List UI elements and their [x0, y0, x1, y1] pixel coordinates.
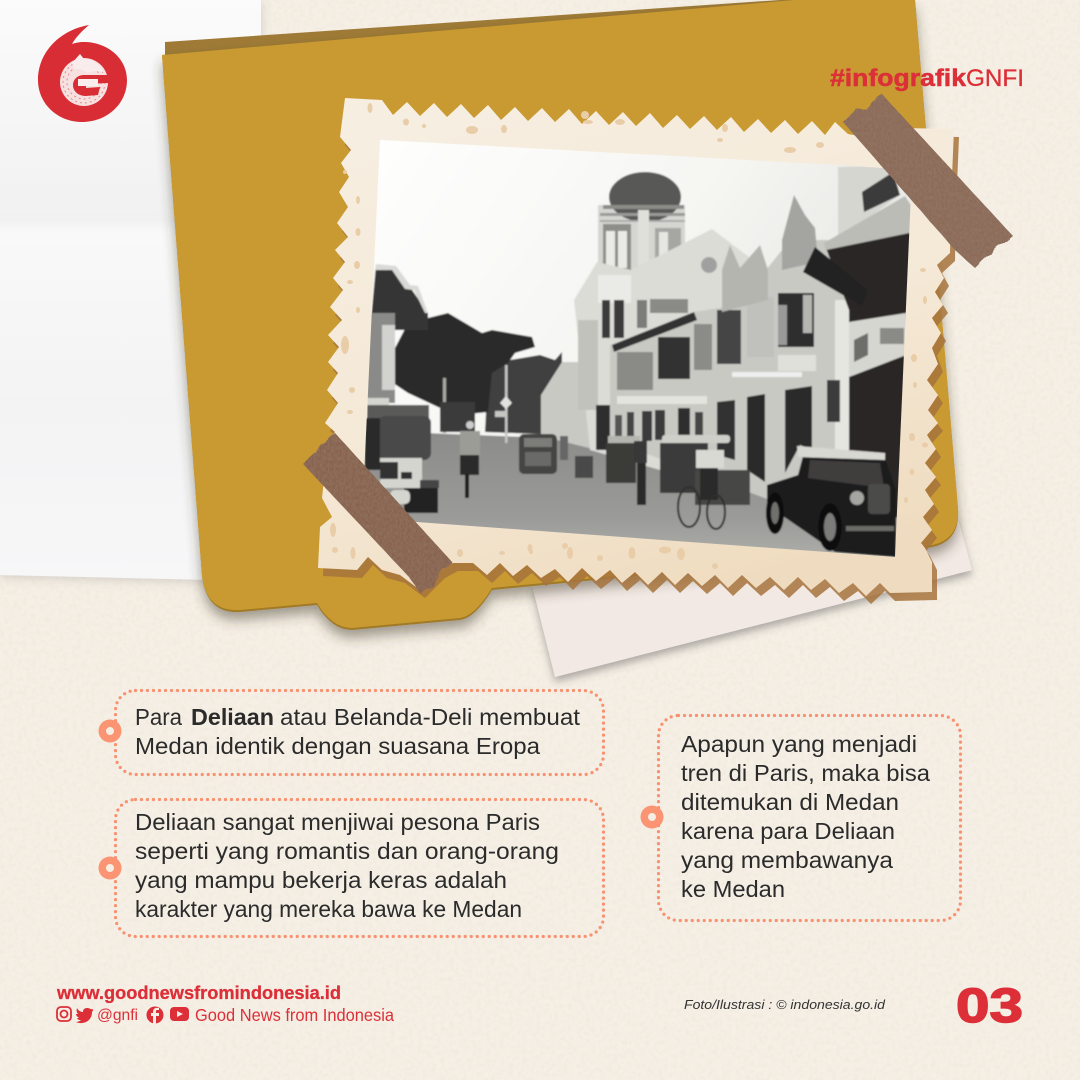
- row of colonial shop houses: [610, 195, 855, 520]
- palm trunk, lamp post and road sign: [440, 365, 512, 443]
- icon: twitter: [76, 1008, 93, 1023]
- frame speckles: [330, 103, 928, 569]
- domed tower: [598, 172, 685, 277]
- photo frame: stamp with zigzag edge: [318, 98, 959, 604]
- text box 3: ke Medan: [681, 876, 785, 902]
- icon: instagram: [57, 1007, 71, 1021]
- left jeep car: [365, 416, 439, 513]
- footer website and social handles: @gnfi: [97, 1007, 138, 1024]
- bullet 3: [640, 806, 664, 828]
- text box 3: karena para Deliaan: [681, 818, 895, 844]
- text box 3: tren di Paris, maka bisa: [681, 760, 930, 786]
- text box 1: [98, 690, 604, 774]
- text box 1: atau Belanda-Deli membuat: [280, 704, 581, 730]
- page number: 03: [956, 980, 1023, 1033]
- masking tape top right: [843, 92, 1012, 268]
- left building: [367, 264, 429, 427]
- gold folder: [162, 0, 958, 630]
- text box 1: Medan identik dengan suasana Eropa: [135, 733, 540, 759]
- footer website and social handles: Good News from Indonesia: [195, 1005, 394, 1025]
- text box 2: karakter yang mereka bawa ke Medan: [135, 896, 522, 922]
- distant trees: [485, 352, 562, 434]
- text box 1: Para: [135, 704, 182, 730]
- photo credit: Foto/Ilustrasi : © indonesia.go.id: [684, 997, 886, 1012]
- eagle head: [72, 54, 104, 73]
- text box 3: Apapun yang menjadi: [681, 731, 917, 757]
- bullet 1: [98, 720, 122, 742]
- road surface: [364, 431, 897, 557]
- hashtag: GNFI: [966, 65, 1024, 92]
- footer website and social handles: www.goodnewsfromindonesia.id: [56, 982, 341, 1003]
- text box 2: [98, 800, 604, 936]
- text box 1: Deliaan: [191, 704, 274, 730]
- letter G: [73, 75, 108, 96]
- pink note paper behind folder: [532, 515, 972, 677]
- ornament ring: [60, 58, 108, 106]
- ring pattern: [63, 61, 105, 103]
- footer website and social handles: [56, 982, 394, 1025]
- bullet 2: [98, 856, 122, 880]
- hashtag: #infografik: [830, 65, 967, 92]
- main tree on the left: [393, 313, 535, 415]
- historic street photograph of Medan: [364, 140, 910, 557]
- text box 2: seperti yang romantis dan orang-orang: [135, 838, 559, 864]
- icon: youtube: [170, 1007, 189, 1021]
- text box 3: ditemukan di Medan: [681, 789, 899, 815]
- black vintage car on the right: [766, 446, 896, 557]
- text box 3: [640, 716, 960, 920]
- masking tape bottom left: [302, 433, 453, 593]
- rickshaws: [560, 435, 750, 505]
- text box 3: yang membawanya: [681, 847, 893, 873]
- cyclists: [460, 421, 725, 529]
- corner building body: [574, 229, 749, 470]
- small car in the road: [519, 434, 557, 474]
- text box 2: yang mampu bekerja keras adalah: [135, 867, 507, 893]
- right corner building with awnings: [803, 165, 914, 520]
- hashtag: [830, 65, 1024, 92]
- sky: [366, 140, 910, 438]
- white torn paper top left: [0, 0, 261, 580]
- distant buildings: [540, 362, 590, 449]
- text box 2: Deliaan sangat menjiwai pesona Paris: [135, 809, 540, 835]
- folder back strip: [165, 0, 915, 70]
- icon: facebook: [146, 1006, 164, 1024]
- GNFI logo: [38, 25, 127, 122]
